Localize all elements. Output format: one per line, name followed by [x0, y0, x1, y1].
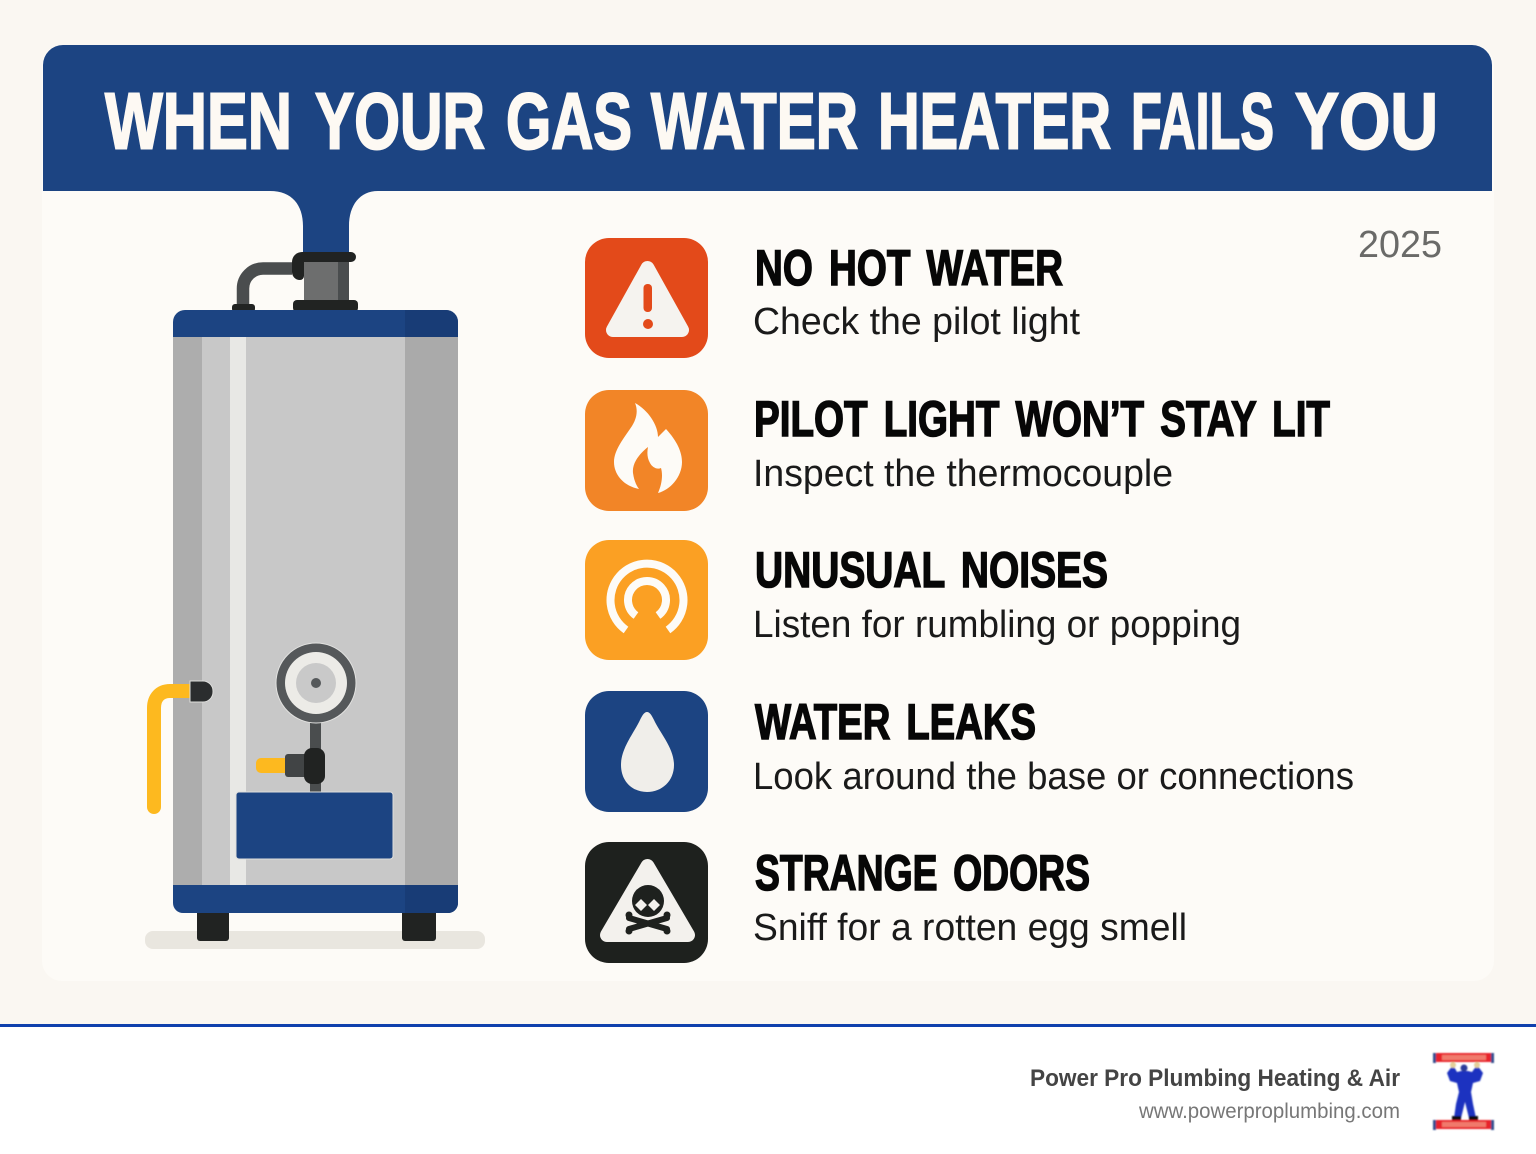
- item: strange odors: [585, 842, 1187, 963]
- item: no hot water: [585, 238, 1080, 358]
- icon: flame: [585, 390, 708, 511]
- temperature gauge: [276, 643, 356, 795]
- logo: strongman holding pipes: [1433, 1053, 1494, 1130]
- icon: sound waves: [585, 540, 708, 660]
- title: WHEN: [105, 76, 292, 166]
- title: HEATER: [878, 76, 1111, 166]
- description: Inspect the thermocouple: [753, 453, 1173, 495]
- title: WATER: [651, 76, 858, 166]
- description: Look around the base or connections: [753, 756, 1354, 798]
- item: water leaks: [585, 691, 1354, 812]
- heading: PILOT LIGHT WON’T STAY LIT: [754, 391, 1330, 447]
- heading: WATER LEAKS: [755, 694, 1036, 750]
- company name: Power Pro Plumbing Heating & Air: [1030, 1065, 1400, 1092]
- description: Listen for rumbling or popping: [753, 604, 1241, 646]
- item: pilot light: [585, 390, 1330, 511]
- title: FAILS: [1131, 76, 1274, 166]
- top pipe fittings: [232, 252, 358, 312]
- header banner with stem: [43, 45, 1492, 262]
- website: www.powerproplumbing.com: [1138, 1100, 1400, 1123]
- control box: [236, 792, 393, 859]
- yellow gas pipe: [154, 681, 213, 807]
- icon: skull hazard: [585, 842, 708, 963]
- title: YOU: [1295, 76, 1438, 166]
- title: GAS: [506, 76, 632, 166]
- title: YOUR: [315, 76, 485, 166]
- item: unusual noises: [585, 540, 1241, 660]
- heading: STRANGE ODORS: [755, 845, 1090, 901]
- water heater illustration: [145, 252, 485, 949]
- year label: 2025: [1358, 224, 1442, 266]
- description: Sniff for a rotten egg smell: [753, 907, 1187, 949]
- description: Check the pilot light: [753, 301, 1080, 343]
- feet: [197, 905, 436, 941]
- main panel: [42, 45, 1494, 981]
- heading: NO HOT WATER: [755, 240, 1063, 296]
- tank body: [173, 310, 458, 913]
- floor shadow: [145, 931, 485, 949]
- gas valve: [256, 748, 325, 784]
- heading: UNUSUAL NOISES: [755, 542, 1108, 598]
- icon: water drop: [585, 691, 708, 812]
- icon: warning triangle: [585, 238, 708, 358]
- footer: [0, 1024, 1536, 1154]
